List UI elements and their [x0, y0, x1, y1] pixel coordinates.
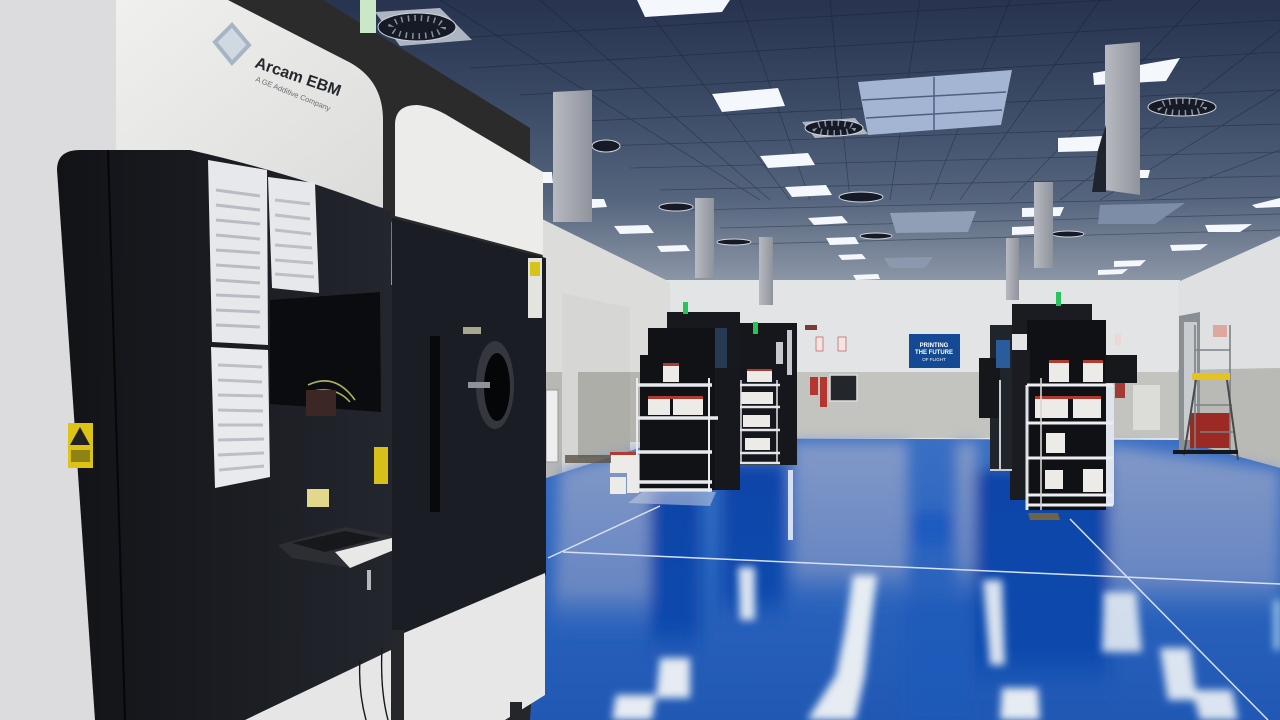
warning panel: [528, 258, 542, 318]
mop head: [1028, 513, 1060, 520]
machine 1 black body: [57, 150, 411, 720]
white base below machine 1: [245, 650, 391, 720]
wall panel and extinguisher: [1115, 333, 1160, 430]
right cart: [990, 360, 1114, 520]
small tag: [463, 327, 481, 334]
center printers: [640, 302, 797, 490]
center cart 1: [610, 363, 718, 506]
machine 2 black body: [392, 218, 546, 633]
warning label right: [374, 447, 388, 484]
ceiling: [300, 0, 1280, 285]
left wall column: [0, 0, 116, 720]
machine 2: [392, 105, 546, 720]
door and ladder: [1173, 312, 1238, 460]
machine rear dark housing: [228, 0, 543, 258]
brand logo: [215, 25, 343, 113]
poster: printing the future of flight: OF FLIGHT: [922, 357, 946, 362]
left wall opening: [546, 293, 670, 478]
hanging ceiling columns: [553, 42, 1140, 305]
center cart 2: [740, 369, 780, 464]
paper sheet lower: [211, 347, 270, 488]
floor: [530, 438, 1280, 720]
poster: printing the future of flight: THE FUTURE: [915, 350, 953, 356]
machine 2 white top panel: [395, 105, 543, 255]
key: [367, 570, 371, 590]
keyboard shelf: [278, 527, 411, 568]
power cables: [360, 648, 388, 720]
right lower wall: [1178, 368, 1280, 468]
control recess: [270, 292, 381, 412]
ceiling vents: [375, 8, 1216, 245]
paper sheet top left: [208, 160, 268, 345]
machine 2 white base: [404, 573, 545, 720]
viewport: [468, 341, 514, 429]
door slot: [430, 336, 440, 512]
floor reflections: [552, 442, 1280, 720]
status beacon: [360, 0, 376, 33]
poster: printing the future of flight: PRINTING: [920, 343, 949, 349]
paper sheet top right: [268, 177, 319, 293]
right printers: [979, 292, 1137, 510]
lower wall band: [665, 372, 1180, 438]
skylight panels: [858, 70, 1185, 268]
back wall: [665, 280, 1180, 440]
poster: printing the future of flight: [909, 334, 960, 368]
caster: [510, 702, 522, 720]
brand logo: A GE Additive Company: [254, 75, 332, 113]
warning label left: [68, 423, 93, 468]
wall fire extinguishers, screen and signs: [805, 325, 857, 407]
machine 1 white top panel: [116, 0, 383, 208]
left side wall: [540, 218, 670, 478]
cables: [308, 381, 355, 402]
floor marking lines: [548, 506, 1280, 720]
warning sticker: [307, 489, 329, 507]
ceiling lights: [540, 0, 1280, 280]
right side wall: [1178, 236, 1280, 468]
brand logo: Arcam EBM: [253, 55, 343, 100]
floor mat: [565, 455, 611, 463]
